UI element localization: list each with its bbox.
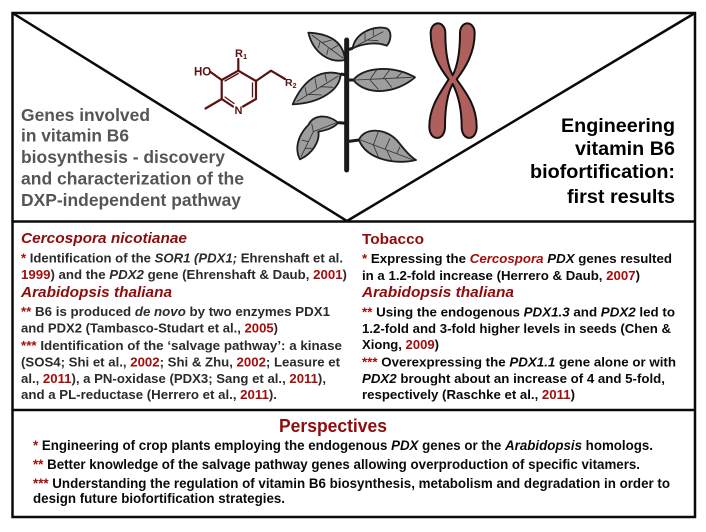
heading: engineering biofortification: Engineering xyxy=(561,116,675,137)
icon: plant xyxy=(293,28,416,170)
text block: Arabidopsis results: respectively (Raschke et al., 2011) xyxy=(362,387,575,402)
text block: Cercospora findings: * Identification of the SOR1 (PDX1; Ehrenshaft et al. xyxy=(21,250,343,266)
icon: chromosome xyxy=(429,23,477,138)
panel: perspectives xyxy=(33,416,670,506)
subheading: Arabidopsis thaliana: Arabidopsis thaliana xyxy=(20,284,172,301)
text block: Arabidopsis findings xyxy=(21,304,342,402)
text block: Tobacco results xyxy=(362,251,672,283)
heading: Perspectives: Perspectives xyxy=(279,416,387,436)
text block: Arabidopsis results: ** Using the endogenous PDX1.3 and PDX2 led to xyxy=(362,304,675,320)
text block: Arabidopsis findings: (SOS4; Shi et al., 2002; Shi & Zhu, 2002; Leasure et xyxy=(21,354,341,370)
heading: discovery of genes: DXP-independent pathway xyxy=(21,190,241,210)
icon: vitamin B6 molecule xyxy=(194,48,297,117)
text block: Arabidopsis findings: al., 2011), a PN-oxidase (PDX3; Sang et al., 2011), xyxy=(21,371,326,386)
heading: engineering biofortification: biofortification: xyxy=(530,162,675,183)
heading: discovery of genes: Genes involved xyxy=(21,105,150,125)
heading: discovery of genes xyxy=(21,105,244,210)
text block: Arabidopsis results: 1.2-fold and 3-fold higher levels in seeds (Chen & xyxy=(362,321,671,336)
text block: Arabidopsis findings: and PDX2 (Tambasco-Studart et al., 2005) xyxy=(21,320,278,336)
text block: Arabidopsis results: *** Overexpressing the PDX1.1 gene alone or with xyxy=(362,354,676,370)
text block: perspectives list xyxy=(33,438,670,506)
subheading: Cercospora nicotianae: Cercospora nicotianae xyxy=(21,230,187,247)
text block: perspectives list: * Engineering of crop plants employing the endogenous PDX genes or the Arabidopsis homologs. xyxy=(33,438,653,453)
panel: discovery text xyxy=(20,230,347,402)
heading: engineering biofortification: vitamin B6 xyxy=(575,139,675,160)
text block: Arabidopsis findings: ** B6 is produced de novo by two enzymes PDX1 xyxy=(21,304,330,319)
text block: Arabidopsis results: PDX2 brought about an increase of 4 and 5-fold, xyxy=(362,371,665,386)
text block: perspectives list: ** Better knowledge of the salvage pathway genes allowing overproduction of specific vitamers. xyxy=(33,457,640,472)
heading: engineering biofortification xyxy=(530,116,675,208)
panel: first results text xyxy=(361,231,676,402)
text block: Tobacco results: * Expressing the Cercospora PDX genes resulted xyxy=(362,251,672,266)
heading: engineering biofortification: first results xyxy=(567,187,675,208)
icon: vitamin B6 molecule: N xyxy=(234,105,242,117)
icon: vitamin B6 molecule: R xyxy=(285,77,293,89)
text block: Arabidopsis results: Xiong, 2009) xyxy=(362,337,439,352)
text block: Cercospora findings xyxy=(21,250,347,282)
icon: vitamin B6 molecule: 1 xyxy=(243,52,247,61)
text block: Arabidopsis results xyxy=(362,304,676,402)
text block: Cercospora findings: 1999) and the PDX2 gene (Ehrenshaft & Daub, 2001) xyxy=(21,267,347,282)
text block: Tobacco results: in a 1.2-fold increase (Herrero & Daub, 2007) xyxy=(362,268,640,283)
icon: vitamin B6 molecule: R xyxy=(235,48,243,60)
text block: perspectives list: *** Understanding the regulation of vitamin B6 biosynthesis, metabolism and degradation in order to xyxy=(33,476,670,491)
subheading: Arabidopsis thaliana: Arabidopsis thaliana xyxy=(361,284,514,301)
heading: discovery of genes: in vitamin B6 xyxy=(21,126,129,146)
heading: discovery of genes: and characterization of the xyxy=(21,168,244,188)
text block: Arabidopsis findings: and a PL-reductase (Herrero et al., 2011). xyxy=(21,387,277,402)
text block: Arabidopsis findings: *** Identification of the ‘salvage pathway’: a kinase xyxy=(21,338,342,353)
heading: discovery of genes: biosynthesis - discovery xyxy=(21,147,225,167)
icon: vitamin B6 molecule: 2 xyxy=(293,83,297,90)
text block: perspectives list: design future biofortification strategies. xyxy=(33,491,285,506)
subheading: Tobacco: Tobacco xyxy=(362,231,424,248)
icon: vitamin B6 molecule: HO xyxy=(194,66,211,78)
